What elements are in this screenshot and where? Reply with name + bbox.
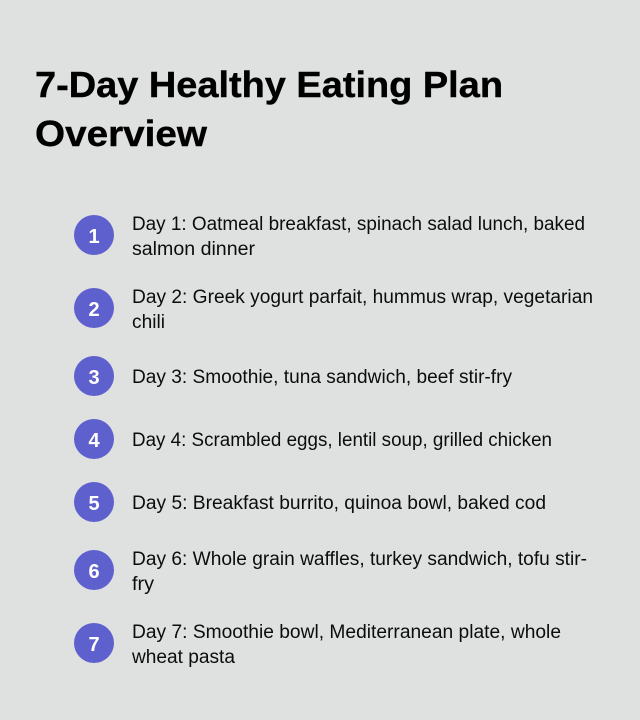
list item: day 3 — [74, 356, 513, 396]
list item: day 6: fry — [132, 574, 155, 595]
list item: day 2: chili — [132, 312, 165, 333]
title: Overview — [35, 113, 208, 154]
list item: day 4 — [74, 419, 552, 459]
list item: day 3: Day 3: Smoothie, tuna sandwich, beef stir-fry — [132, 367, 513, 388]
list item: day 1: Day 1: Oatmeal breakfast, spinach salad lunch, baked — [132, 214, 585, 235]
list item: day 7: wheat pasta — [131, 647, 235, 668]
list item: day 4: 4 — [88, 430, 100, 452]
list item: day 5: Day 5: Breakfast burrito, quinoa bowl, baked cod — [132, 493, 546, 514]
list item: day 7: 7 — [88, 634, 100, 656]
list item: day 5: 5 — [88, 493, 100, 515]
list item: day 5 — [74, 482, 546, 522]
list item: day 2: 2 — [88, 299, 100, 321]
list item: day 1 — [74, 214, 585, 260]
list item: day 1: 1 — [88, 226, 100, 248]
list item: day 6: 6 — [88, 561, 100, 583]
list item: day 2 — [74, 287, 593, 333]
list item: day 2: Day 2: Greek yogurt parfait, hummus wrap, vegetarian — [132, 287, 593, 308]
list item: day 7 — [74, 622, 561, 668]
list item: day 6 — [74, 549, 587, 595]
list item: day 6: Day 6: Whole grain waffles, turkey sandwich, tofu stir- — [132, 549, 587, 570]
list item: day 4: Day 4: Scrambled eggs, lentil soup, grilled chicken — [132, 430, 552, 451]
list item: day 7: Day 7: Smoothie bowl, Mediterranean plate, whole — [132, 622, 561, 643]
title: 7-Day Healthy Eating Plan — [35, 64, 503, 105]
list item: day 1: salmon dinner — [132, 239, 256, 260]
day list — [74, 214, 593, 668]
list item: day 3: 3 — [88, 367, 100, 389]
title — [35, 64, 503, 154]
